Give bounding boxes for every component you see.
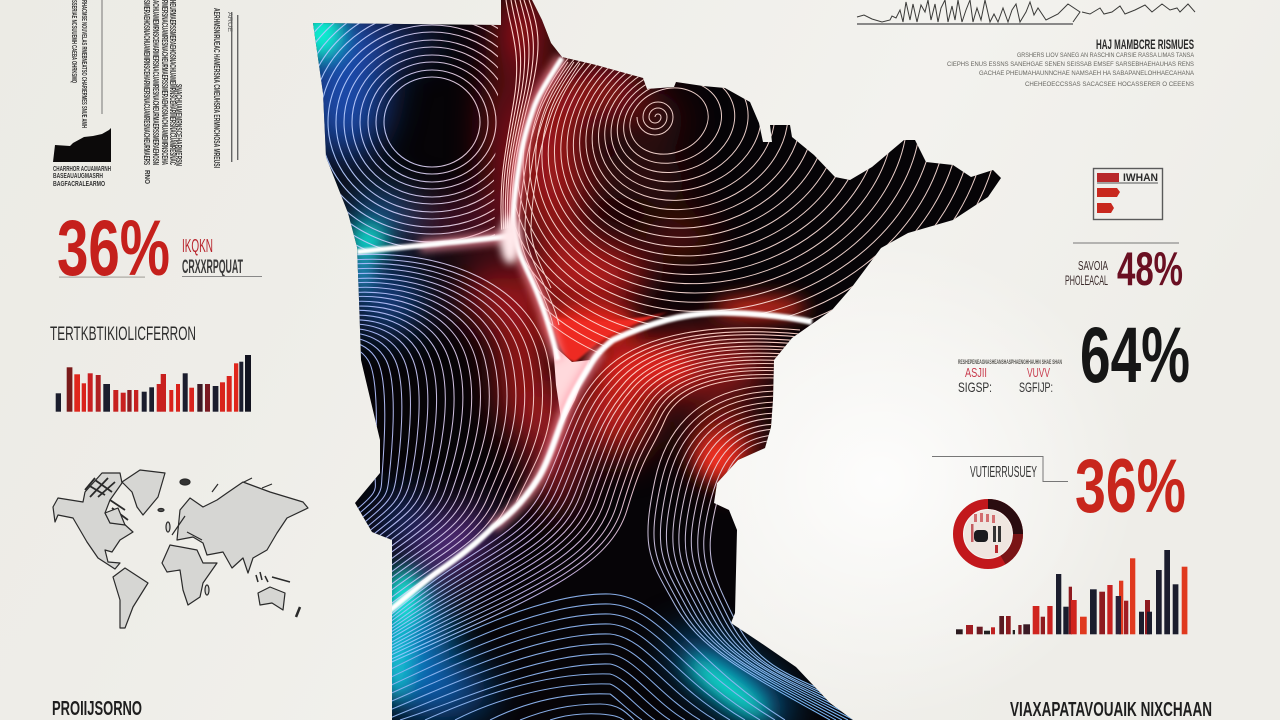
top right text block: GACHAE PHEUMAHAUNNCHAE NAMSAEH HA SABAPANELOHHAECAHANA <box>979 70 1195 77</box>
contour lines top strip <box>501 0 538 235</box>
top right text block: CHEHEOECCSSAS SACACSEE HOCASSERER O CEEENS <box>1025 81 1195 88</box>
left stat caption: IKQKN <box>182 236 213 256</box>
small stat labels: VUVV <box>1027 365 1050 380</box>
bottom left label: PROIIJSORNO <box>52 698 142 720</box>
seismograph line chart <box>857 0 1195 24</box>
white vertical band <box>513 58 562 360</box>
left bar chart <box>56 355 251 412</box>
right stat 36 percent: 36% <box>1075 444 1186 529</box>
vertical text column group three with frame <box>212 8 238 168</box>
cross glow <box>500 216 520 264</box>
vertical text column group two: RNO <box>143 170 150 184</box>
right bar chart <box>956 550 1187 634</box>
donut chart icon <box>958 504 1018 564</box>
small stat labels: SIGSP: <box>958 379 992 395</box>
solid red patch <box>552 312 668 362</box>
right stat 64 percent: 64% <box>1080 310 1190 399</box>
small stat labels <box>958 360 1062 395</box>
contour lines along diagonal band <box>385 328 800 665</box>
vertical text column group one: SSERIAE NCSUUEMH CAEBA OHRKSMQ <box>70 0 79 83</box>
contour lines upper left <box>314 23 498 250</box>
contour map of the region <box>313 0 1001 720</box>
small stat labels: ASJII <box>965 365 987 380</box>
map base fill <box>300 0 1020 720</box>
white diagonal band <box>388 313 812 612</box>
top right text block: GRSHERS LIOV SANEG AN RASCHIN CARSIE RASSA LIMAS TANSA <box>1017 52 1195 59</box>
small stat labels: RESHEPENEAGNASHEANSHASPHAENGHHAUHN SHAE SHAN <box>958 360 1062 366</box>
small stat labels: SGFIJP: <box>1019 379 1053 395</box>
vertical text column group two: SNACHUAMEMRNSCEHARMERSN <box>174 84 183 166</box>
world map <box>53 470 308 628</box>
vertical text column group one: RHACMSE NOUVELAS RMEBNEATSO CHARIERMES SNUE AMH <box>80 0 89 128</box>
left stat caption: CRXXRPQUAT <box>182 257 243 278</box>
right stat 48 percent: SAVOIA <box>1078 258 1108 273</box>
vertical text column group two: RMERSNACUAMRESNACHEURMAERSSMERAEHOSNACHUAMEMRNSCEHA <box>160 0 169 165</box>
vertical text column group one <box>70 0 102 128</box>
bar chart title: TERTKBTIKIOLICFERRON <box>50 324 196 345</box>
pink glow behind bands <box>420 58 600 527</box>
vertical text column group three with frame: ARUE <box>226 12 232 32</box>
contour lines spiral upper right <box>516 57 992 354</box>
left stat caption <box>182 236 262 278</box>
map colour glows <box>300 0 808 720</box>
vertical text column group two: ACHUAMEMRNSCEHARMERSNACUAMRESNACHEURMAERSSMERAEHOSN <box>151 0 160 165</box>
pale centre glow <box>553 345 590 425</box>
right stat 48 percent: PHOLEACAL <box>1065 272 1108 288</box>
top right text block: HAJ MAMBCRE RISMUES <box>1096 36 1194 52</box>
contour domes at bottom <box>385 594 785 720</box>
area chart with caption: BAGFACRALEARMO <box>53 179 105 188</box>
vertical text column group two: SMERAEHOSNACHUAMEMRNSCEHARMERSNACUAMRESNACHEURMAERS <box>142 0 151 165</box>
legend box <box>1094 168 1162 220</box>
vertical text column group three with frame: AERHMSNIRUEAC HAMERSNA CMEUHSRA ERMNCHOSA MREUSI <box>212 8 221 168</box>
vertical text column group two: HEURMAERSSMERAEHOSNACHUAMEMRNSCEHARMERSNACUAMRESNAC <box>168 0 177 165</box>
callout with connector: VUTIERRUSUEY <box>970 464 1037 481</box>
right stat 48 percent <box>1065 242 1183 295</box>
callout with connector <box>932 456 1068 482</box>
area chart with caption: BASEAUAUGMASRH <box>53 171 103 180</box>
vertical text column group two <box>142 0 183 184</box>
contour lines lower left <box>357 254 552 604</box>
left stat 36 percent: 36% <box>57 203 170 292</box>
right stat 48 percent: 48% <box>1117 242 1183 295</box>
white horizontal band <box>357 236 513 252</box>
top right text block: CIEPHS ENUS ESSNS SANEHGAE SENEN SEISSAB EMSEF SARSEBHAEHAUHAS RENS <box>947 61 1195 68</box>
contour lines falling to lower right <box>647 384 853 720</box>
area chart with caption: CHARRHOR ACUAMARNH <box>53 164 111 173</box>
legend box: IWHAN <box>1123 172 1158 184</box>
area chart with caption <box>53 128 111 188</box>
top right text block <box>947 36 1195 88</box>
